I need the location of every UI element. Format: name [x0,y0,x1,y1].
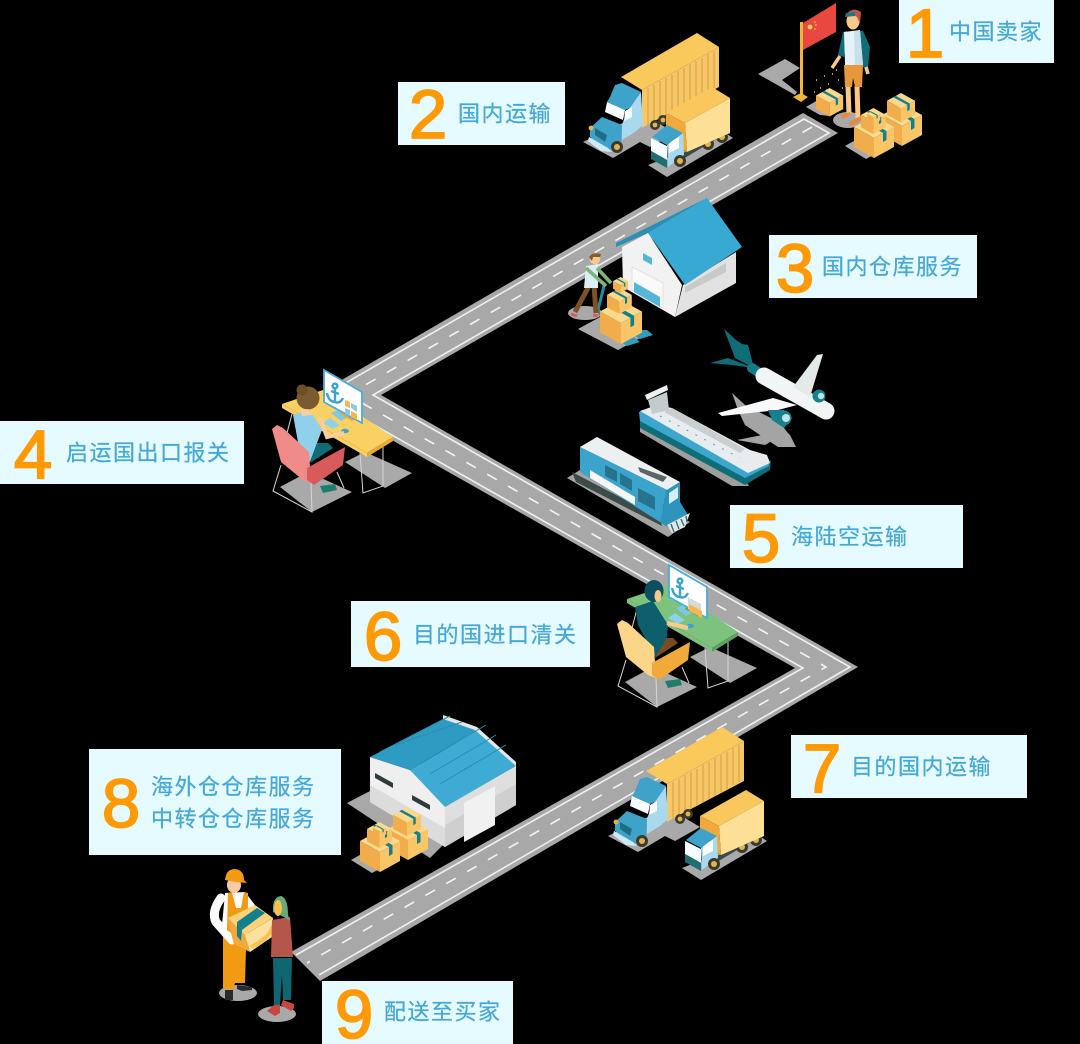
label 7: 目的国内运输 [791,730,1027,807]
label 4: 启运国出口报关: 启运国出口报关 [66,440,231,466]
icon: seller figure with parcel [806,10,870,128]
label 6: 目的国进口清关 [351,598,590,675]
label 9: 配送至买家: 配送至买家 [384,1000,502,1024]
label 8: 海外仓仓库服务 / 中转仓仓库服务: 中转仓仓库服务 [151,806,316,832]
label 8: 海外仓仓库服务 / 中转仓仓库服务: 8 [102,765,140,842]
label 2: 国内运输 [398,76,565,153]
label 2: 国内运输: 国内运输 [458,102,552,126]
icon: trucks, domestic transport [583,33,733,177]
label 5: 海陆空运输: 5 [742,500,780,577]
icon: airplane [710,329,826,447]
label 3: 国内仓库服务 [769,230,977,307]
label 4: 启运国出口报关 [0,416,244,493]
label 1: 中国卖家 [899,0,1054,72]
icon: cargo ship [639,385,771,486]
icon: customs desk, export declaration [272,370,412,512]
icon: flag of China [758,3,836,102]
icon: worker with pallet jack [568,253,653,350]
label 1: 中国卖家: 中国卖家 [949,20,1043,44]
icon: customs desk, import declaration [617,565,757,707]
icon: courier handing parcel to buyer [214,869,296,1022]
label 8: 海外仓仓库服务 / 中转仓仓库服务 [89,749,341,855]
label 6: 目的国进口清关: 6 [364,598,402,675]
icon: overseas warehouse [347,715,516,858]
label 7: 目的国内运输: 目的国内运输 [851,754,992,780]
label 5: 海陆空运输 [730,500,963,577]
label 5: 海陆空运输: 海陆空运输 [791,524,909,550]
icon: trucks, destination transport [608,727,767,880]
road [291,113,858,981]
icon: stacked parcels [845,93,922,159]
label 3: 国内仓库服务: 3 [776,230,814,307]
label 6: 目的国进口清关: 目的国进口清关 [413,622,578,648]
icon: domestic warehouse [616,198,742,317]
label 3: 国内仓库服务: 国内仓库服务 [822,254,963,280]
icon: locomotive [567,437,690,537]
label 9: 配送至买家 [322,976,513,1044]
label 8: 海外仓仓库服务 / 中转仓仓库服务: 海外仓仓库服务 [151,774,316,800]
label 2: 国内运输: 2 [409,76,447,153]
label 7: 目的国内运输: 7 [803,730,841,807]
label 4: 启运国出口报关: 4 [14,416,52,493]
icon: parcels by warehouse [351,807,428,873]
